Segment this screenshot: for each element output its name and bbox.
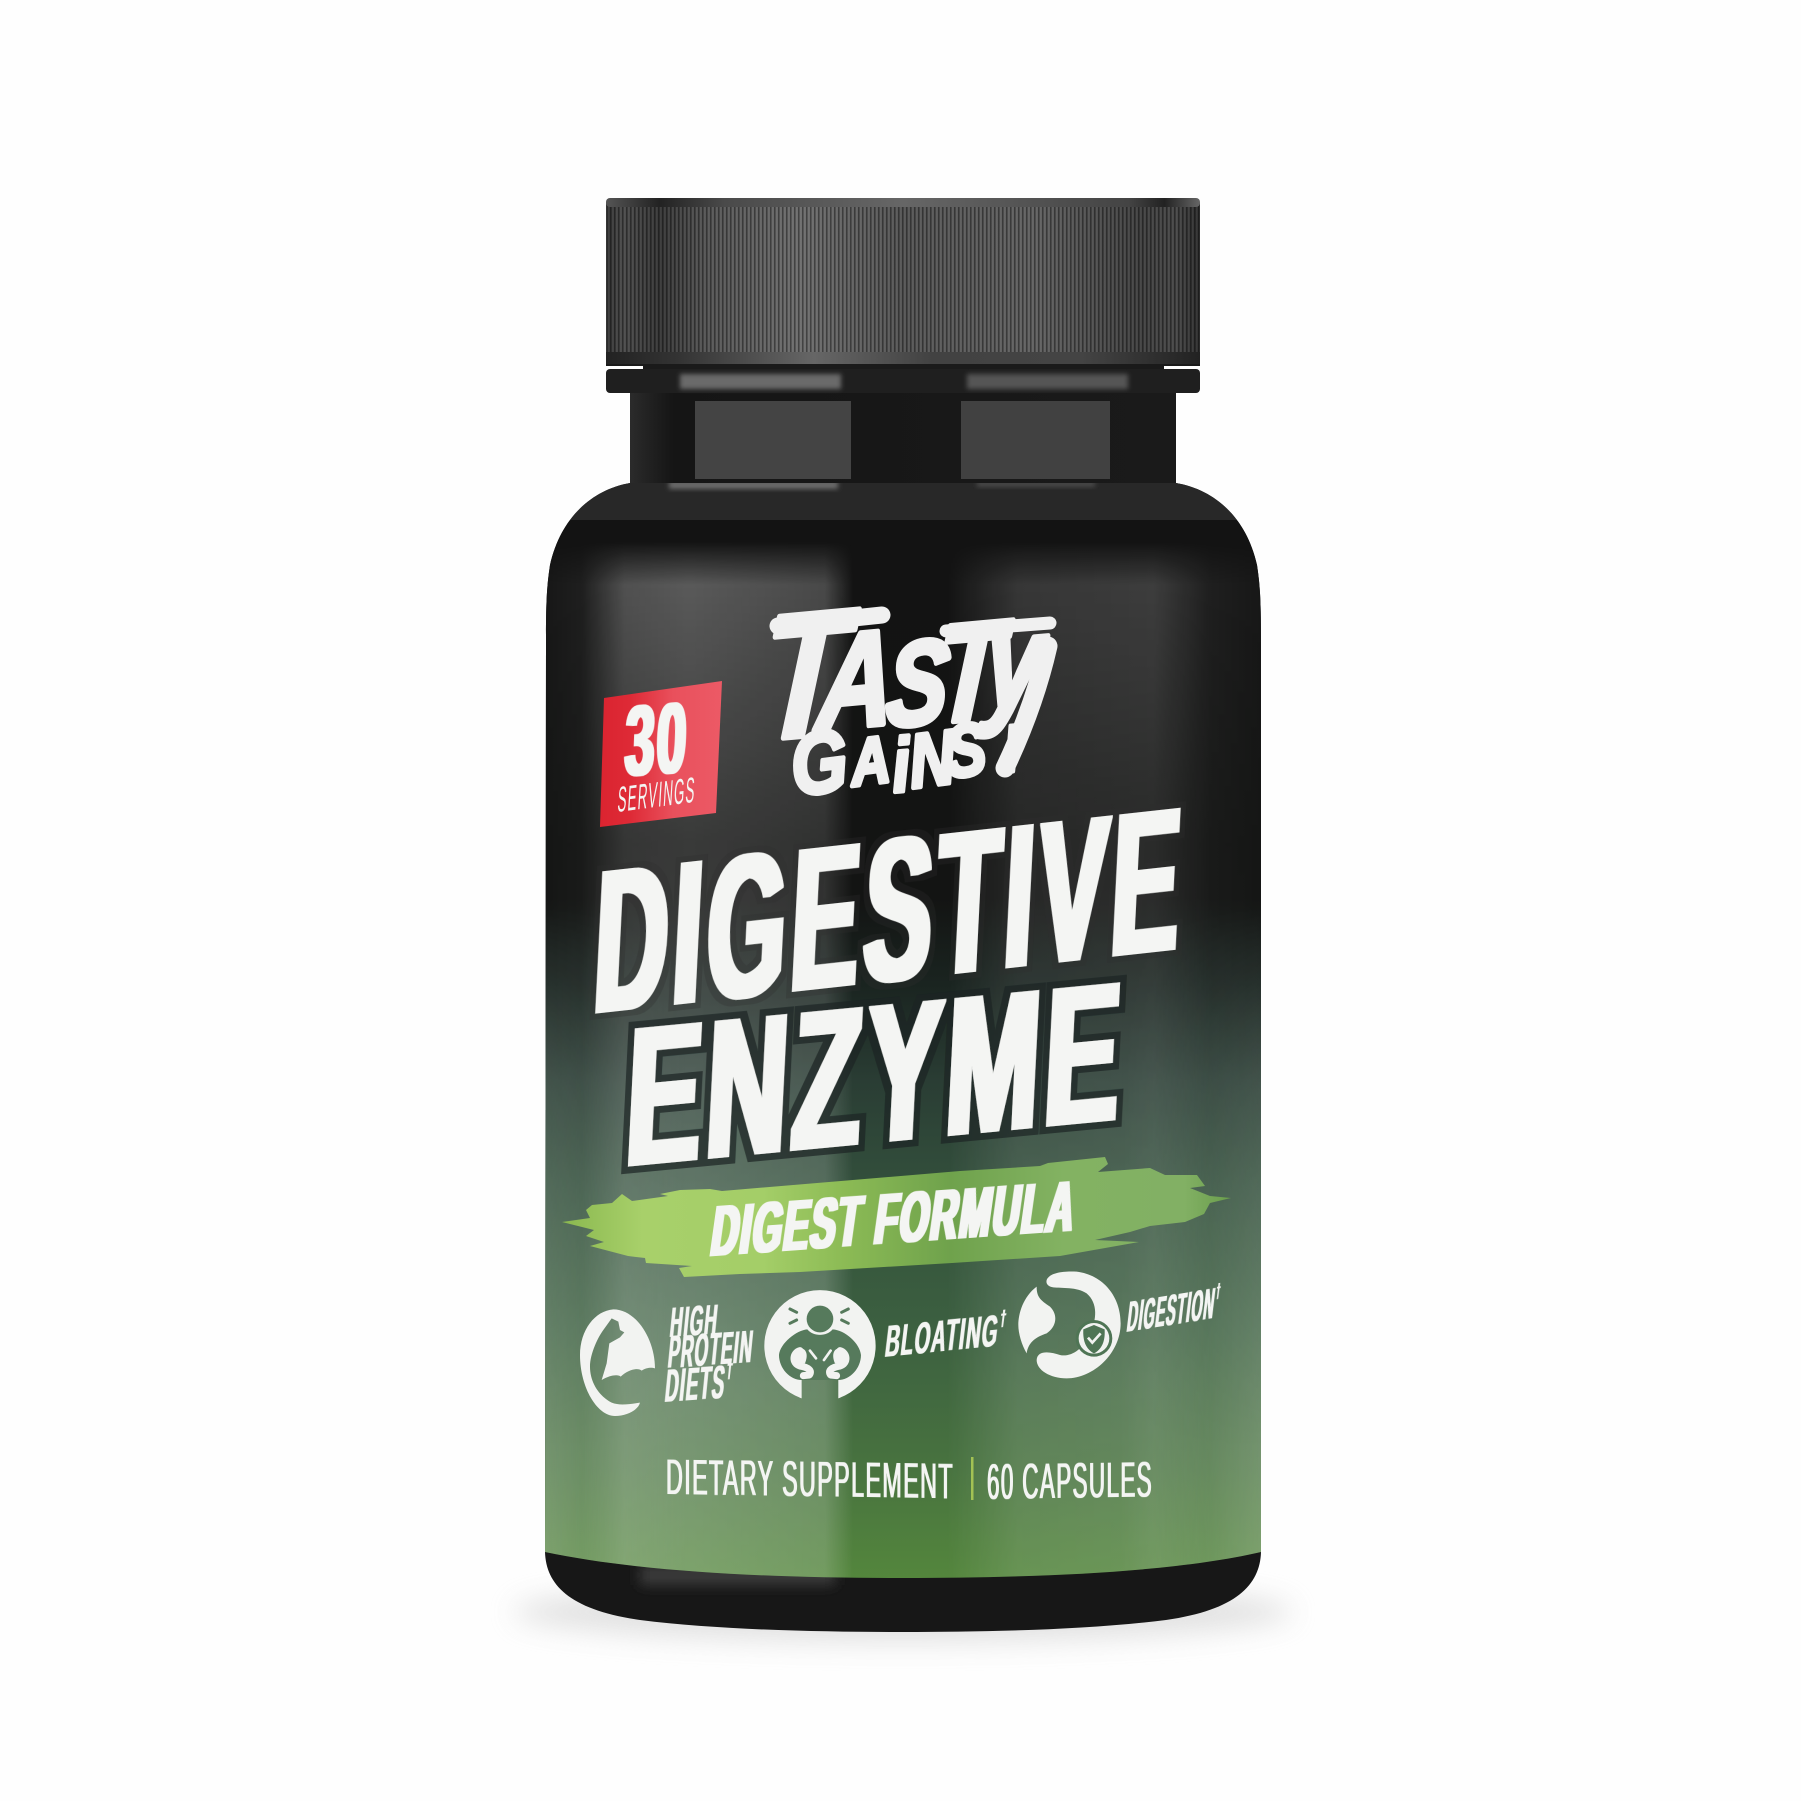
logo T and y cross strokes: [778, 615, 1050, 768]
text: DIGESTIVE: [590, 765, 1191, 1057]
title: Enzyme: ENZYME: [622, 940, 1131, 1209]
text: SERVINGS: [617, 769, 697, 820]
collar ring: [606, 369, 1200, 393]
logo word Gains: !: [1000, 710, 1022, 786]
badge number: 30: [623, 682, 691, 798]
text: PROTEIN: [666, 1320, 756, 1378]
text: †: [1215, 1280, 1222, 1303]
bottle cap: [606, 198, 1200, 369]
icon: stomach with shield: [1018, 1271, 1121, 1378]
bottle: [530, 198, 1290, 1650]
label: high protein diets: HIGH: [668, 1296, 721, 1346]
logo word Gains: A: [846, 721, 893, 800]
label: high protein diets: DIETS: [663, 1348, 822, 1412]
text: BLOATING: [883, 1291, 1144, 1367]
icon: bloating person: [764, 1290, 876, 1398]
logo word Gains: S: [942, 708, 990, 794]
logo word Tasty: T: [924, 591, 1024, 753]
label: high protein diets: [663, 1296, 756, 1412]
logo word Gains: i: [890, 722, 914, 808]
ground shadow: [513, 1582, 1293, 1642]
icon: flexed arm: [580, 1309, 655, 1416]
text: DIGESTION: [1125, 1250, 1400, 1342]
banner text: digest formula: DIGEST FORMULA: [707, 1166, 1082, 1272]
label: high protein diets: †: [726, 1353, 735, 1384]
base rim highlight: [640, 1565, 835, 1585]
label: bloating: †: [999, 1305, 1009, 1331]
text: DIETARY SUPPLEMENT: [666, 1449, 954, 1509]
gloss highlights: [566, 547, 1232, 1578]
bottle body: [530, 480, 1290, 1650]
brush stroke banner: [562, 1157, 1231, 1277]
logo word Tasty: T: [745, 570, 873, 778]
text: 60 CAPSULES: [987, 1452, 1153, 1510]
logo word Tasty: S: [876, 613, 960, 753]
logo word Gains: G: [787, 711, 851, 816]
printed label: [530, 520, 1280, 1600]
logo word Tasty: A: [803, 600, 908, 759]
logo: Tasty Gains: [745, 570, 1062, 816]
logo word Tasty: y: [970, 587, 1060, 738]
shoulder highlights: [570, 483, 1237, 520]
label edge sheen: [545, 963, 1261, 1568]
divider: [971, 1457, 974, 1500]
bottle neck: [630, 390, 1176, 490]
logo word Gains: N: [906, 714, 960, 804]
badge: 30 servings: [600, 681, 722, 827]
badge background: [600, 681, 722, 827]
